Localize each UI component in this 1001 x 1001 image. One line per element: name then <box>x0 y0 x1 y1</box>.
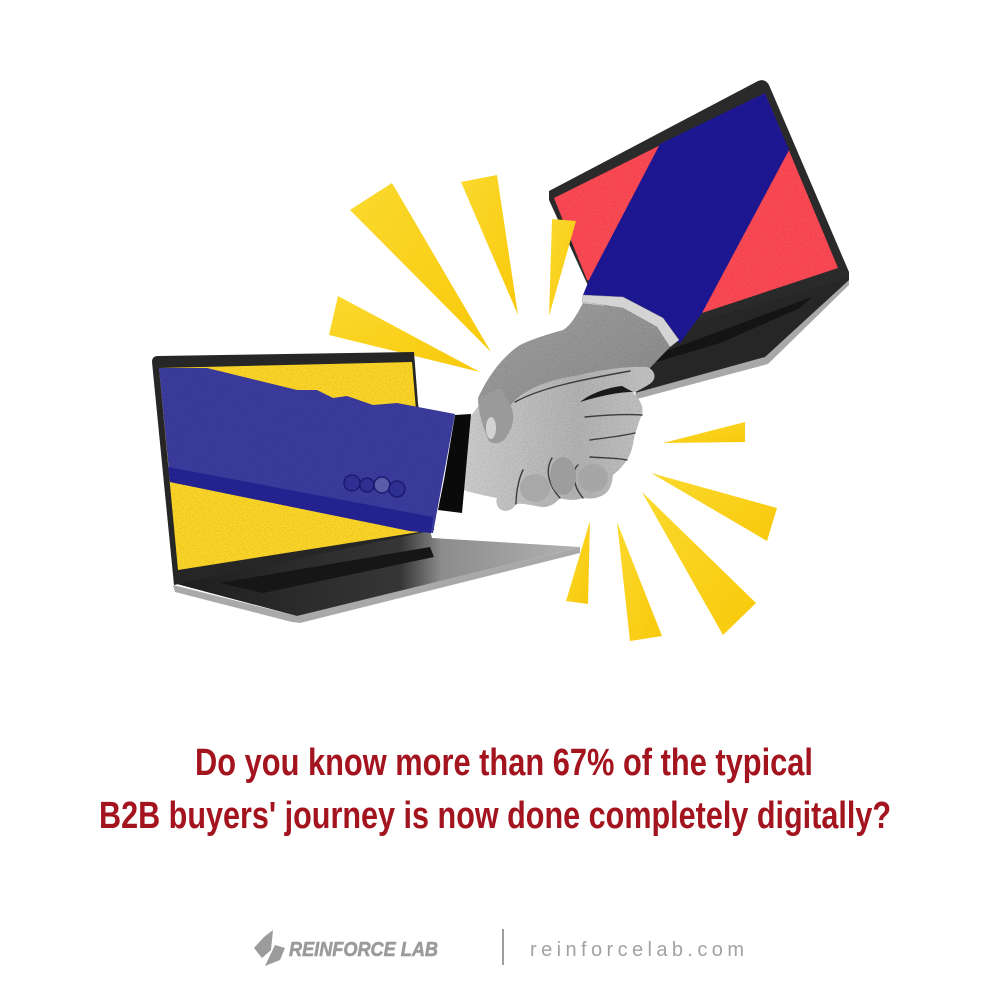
finger shadows <box>515 371 642 504</box>
outer knuckle shading <box>578 464 608 492</box>
thumb nail highlight <box>486 417 496 439</box>
headline line 1: Do you know more than 67% of the typical <box>195 742 813 784</box>
lower knuckle shading <box>550 457 576 495</box>
upper hand thumb <box>478 388 513 443</box>
right laptop base <box>632 272 849 396</box>
dark gap between fingers <box>580 386 633 402</box>
right laptop keyboard <box>650 297 812 364</box>
sleeve hem shadow <box>168 467 433 533</box>
left laptop keyboard <box>220 547 434 593</box>
footer divider <box>502 929 504 965</box>
yellow burst rays <box>329 175 777 641</box>
left arm blue sleeve <box>159 368 455 533</box>
website url: reinforcelab.com <box>530 939 744 961</box>
left laptop yellow screen <box>159 362 432 570</box>
brand name: REINFORCE LAB <box>289 939 438 961</box>
right laptop silver edge <box>635 280 849 399</box>
footer brand <box>254 929 744 966</box>
left laptop deck <box>173 530 580 616</box>
right arm blue sleeve <box>583 93 789 343</box>
handshake <box>463 295 679 511</box>
yellow ray over right laptop <box>549 219 576 316</box>
left laptop silver edge <box>173 547 580 623</box>
sleeve buttons <box>344 475 405 497</box>
right laptop lid <box>549 80 849 321</box>
white shirt cuff <box>582 295 679 347</box>
thumb shading <box>520 474 550 502</box>
right laptop red screen <box>554 93 838 313</box>
left arm black shirt cuff <box>438 414 471 513</box>
upper hand <box>478 303 670 420</box>
logo mark <box>254 930 285 966</box>
left laptop <box>152 352 580 623</box>
question headline <box>99 742 891 837</box>
right laptop <box>549 80 849 399</box>
left laptop lid <box>152 352 434 585</box>
lower hand <box>463 367 654 511</box>
